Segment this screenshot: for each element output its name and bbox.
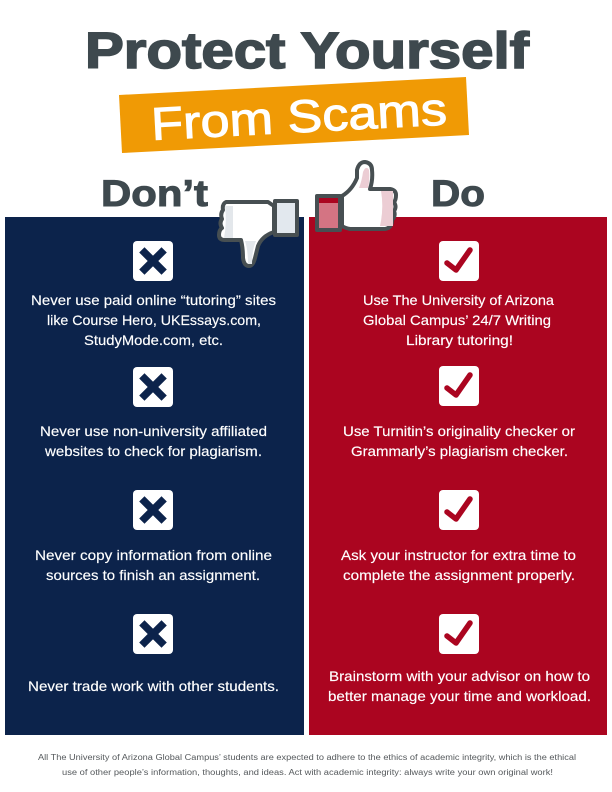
icon: check 2 [439, 366, 479, 406]
text: don't 1 [31, 292, 276, 348]
footer note: use of other people’s information, thoughts, and ideas. Act with academic integrity: always write your own original work! [62, 768, 553, 777]
text: don't 3 [35, 547, 272, 583]
text: don't 2: Never use non-university affiliated [40, 423, 267, 439]
icon: x 4 [133, 614, 173, 654]
text: do 3: Ask your instructor for extra time to [341, 547, 576, 563]
banner: From Scams [119, 77, 469, 153]
text: don't 4: Never trade work with other students. [28, 678, 279, 694]
text: don't 1: StudyMode.com, etc. [84, 332, 223, 348]
panel: don't [5, 217, 304, 735]
heading: Don't: Don’t [101, 173, 208, 214]
icon: thumbs up [317, 162, 396, 230]
text: do 4: better manage your time and workload. [328, 688, 591, 704]
icon: x 3 [133, 490, 173, 530]
footer note: All The University of Arizona Global Campus’ students are expected to adhere to the ethics of academic integrity, which is the ethical [38, 753, 576, 762]
heading: Do: Do [431, 173, 485, 214]
text: do 4 [328, 668, 591, 704]
text: do 2 [343, 423, 575, 459]
title: Protect Yourself [85, 22, 530, 79]
panel: do [309, 217, 607, 735]
text: don't 2 [40, 423, 267, 459]
text: don't 1: like Course Hero, UKEssays.com, [47, 312, 261, 328]
text: don't 3: Never copy information from online [35, 547, 272, 563]
text: don't 1: Never use paid online “tutoring” sites [31, 292, 276, 308]
text: do 2: Use Turnitin’s originality checker or [343, 423, 575, 439]
text: don't 2: websites to check for plagiarism. [44, 443, 262, 459]
icon: check 1 [439, 241, 479, 281]
text: do 1 [363, 292, 554, 348]
text: do 1: Use The University of Arizona [363, 292, 554, 308]
icon: check 4 [439, 614, 479, 654]
icon: check 3 [439, 490, 479, 530]
icon: thumbs down [219, 201, 297, 266]
text: do 1: Global Campus’ 24/7 Writing [363, 312, 551, 328]
text: don't 3: sources to finish an assignment. [46, 567, 260, 583]
text: do 1: Library tutoring! [406, 332, 513, 348]
icon: x 1 [133, 241, 173, 281]
text: do 3 [341, 547, 576, 583]
text: do 2: Grammarly’s plagiarism checker. [351, 443, 568, 459]
icon: x 2 [133, 367, 173, 407]
text: do 4: Brainstorm with your advisor on how to [329, 668, 590, 684]
text: do 3: complete the assignment properly. [343, 567, 575, 583]
banner: From Scams: From Scams [150, 83, 448, 150]
footer note [38, 753, 576, 777]
